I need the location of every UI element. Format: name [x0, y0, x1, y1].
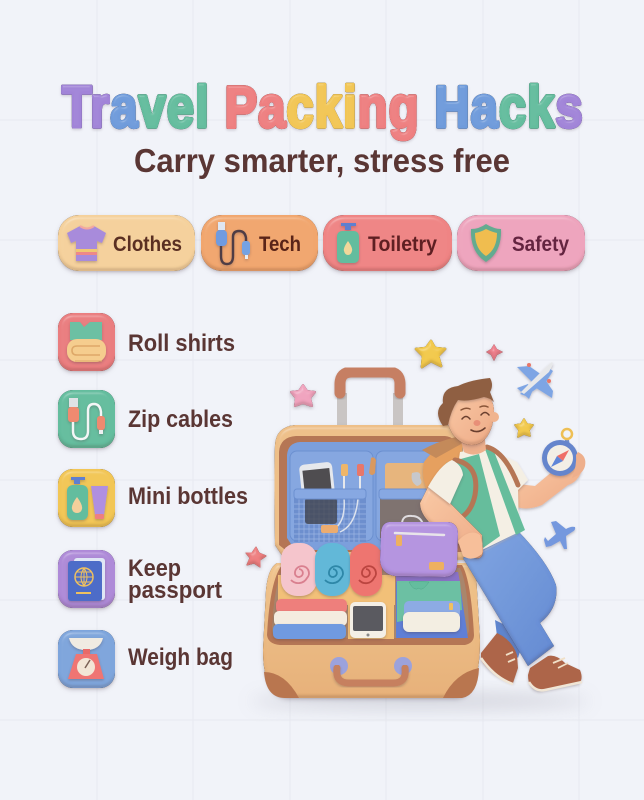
front shoe — [528, 656, 582, 691]
suitcase front handle — [330, 657, 412, 683]
pill: tech — [201, 215, 318, 271]
pill: clothes: Clothes — [113, 233, 182, 256]
hack: zip cables — [58, 390, 233, 448]
pill: tech: Tech — [259, 233, 301, 256]
towel: red — [350, 543, 382, 596]
hand with compass — [542, 429, 585, 478]
category pills — [58, 215, 585, 271]
suitcase base — [263, 563, 480, 698]
backpack — [422, 437, 463, 510]
back leg and shoe — [481, 620, 525, 684]
jeans — [463, 530, 556, 666]
suitcase corners — [264, 668, 479, 698]
suitcase — [263, 372, 480, 698]
hack: keep passport: Keep — [128, 555, 181, 582]
bag — [380, 516, 458, 577]
traveler — [380, 378, 585, 691]
pill: clothes — [58, 215, 195, 271]
hack: keep passport — [58, 550, 222, 608]
right arm — [512, 460, 582, 508]
star: large yellow — [416, 341, 445, 367]
hack: weigh bag — [58, 630, 233, 688]
mesh pockets — [294, 489, 439, 542]
towel: pink — [281, 543, 317, 596]
star: small yellow — [515, 419, 533, 437]
hack list — [58, 313, 248, 688]
suitcase lid — [274, 425, 470, 560]
left hand — [458, 533, 483, 559]
hack: roll shirts: Roll shirts — [128, 330, 235, 357]
title: Travel Packing Hacks — [62, 76, 584, 140]
backpack straps — [455, 447, 518, 517]
left arm — [420, 487, 483, 558]
rolled towels — [281, 543, 382, 596]
suitcase telescopic handle — [337, 372, 403, 427]
pill: safety — [457, 215, 585, 271]
pill: toiletry: Toiletry — [368, 233, 437, 256]
head — [438, 378, 499, 445]
pill: toiletry — [323, 215, 452, 271]
left sleeve — [428, 460, 463, 504]
towel: blue — [315, 543, 350, 596]
hack: mini bottles: Mini bottles — [128, 483, 248, 510]
hack: zip cables: Zip cables — [128, 406, 233, 433]
star: pink — [291, 385, 315, 406]
plane: blue — [544, 521, 575, 549]
hack: weigh bag: Weigh bag — [128, 644, 233, 671]
star: small pink sparkle — [486, 344, 503, 361]
hack: roll shirts — [58, 313, 235, 371]
vest — [446, 449, 525, 548]
plane: white and blue — [517, 362, 553, 399]
neck — [458, 430, 486, 455]
packed items — [273, 572, 468, 639]
hack: keep passport: passport — [128, 577, 222, 604]
ground shadow — [250, 694, 590, 708]
pocket items — [299, 457, 437, 515]
subtitle: Carry smarter, stress free — [134, 142, 510, 179]
star: red — [246, 547, 266, 567]
pill: safety: Safety — [512, 233, 569, 256]
torso shirt — [452, 448, 528, 550]
hack: mini bottles — [58, 469, 248, 527]
